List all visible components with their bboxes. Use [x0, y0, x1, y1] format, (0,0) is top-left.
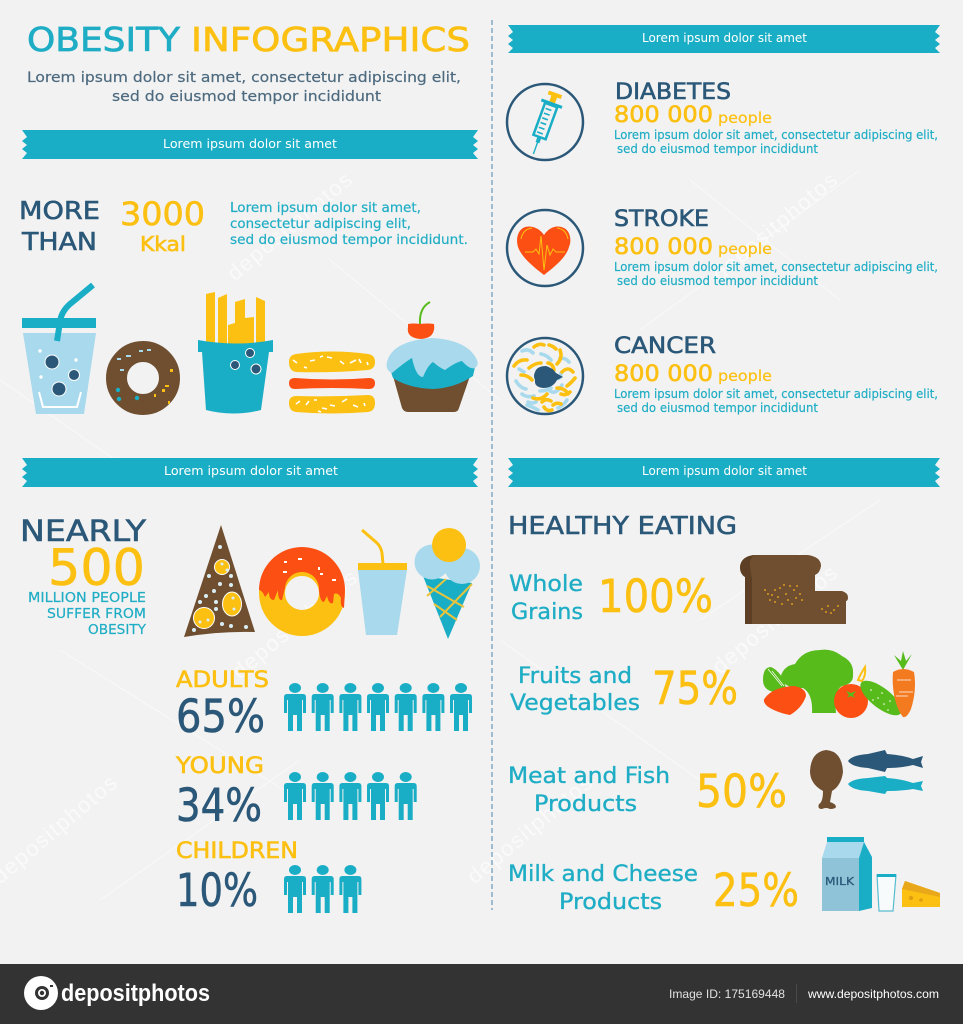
disease: diabetes: 800 000 — [614, 103, 713, 128]
icon: french fries — [198, 292, 273, 414]
stat: adults: ADULTS — [176, 668, 269, 693]
row: whole grains: Whole — [509, 572, 583, 597]
disease: diabetes: sed do eiusmod tempor incididunt — [617, 142, 818, 156]
icon: milk carton — [822, 837, 872, 911]
banner: statistics: Lorem ipsum dolor sit amet — [164, 464, 338, 478]
footer image id: Image ID: 175169448 — [669, 987, 785, 1001]
row: whole grains: Grains — [511, 600, 583, 625]
row: meat and fish — [508, 750, 923, 818]
banner: diseases: Lorem ipsum dolor sit amet — [642, 31, 807, 45]
nearly 500 million: OBESITY — [88, 622, 147, 638]
stat: young: YOUNG — [175, 754, 264, 779]
disease: cancer: people — [718, 367, 772, 385]
banner: calories — [22, 130, 478, 159]
row: milk and cheese: Products — [559, 890, 662, 915]
calorie description: consectetur adipiscing elit, — [230, 217, 411, 232]
more than 3000 kkal: Kkal — [140, 232, 186, 256]
footer bar — [0, 964, 963, 1024]
disease: cancer: CANCER — [614, 334, 716, 359]
stat: adults: 65% — [176, 690, 265, 743]
row: fruits and vegetables: Vegetables — [510, 691, 640, 716]
text: depositphotos — [707, 560, 842, 679]
calorie description: Lorem ipsum dolor sit amet, — [230, 201, 421, 216]
disease: stroke: sed do eiusmod tempor incididunt — [617, 274, 818, 288]
subtitle — [27, 70, 461, 105]
icon: vegetables — [763, 650, 915, 721]
icon: drink cup — [358, 530, 407, 635]
row: meat and fish: 50% — [696, 765, 787, 818]
healthy eating heading: HEALTHY EATING — [508, 511, 737, 540]
icon: milk carton: MILK — [825, 875, 855, 888]
disease: diabetes — [614, 80, 938, 156]
icon: cupcake — [387, 302, 478, 412]
row: fruits and vegetables — [510, 650, 915, 721]
row: fruits and vegetables: 75% — [652, 662, 738, 715]
row: milk and cheese: Milk and Cheese — [508, 862, 698, 887]
icon: glazed donut — [259, 547, 345, 623]
disease: stroke: people — [718, 240, 772, 258]
stat: young — [175, 754, 417, 832]
text: depositphotos — [462, 770, 597, 889]
stat: children: CHILDREN — [176, 839, 298, 864]
more than 3000 kkal: MORE — [19, 196, 100, 225]
row: whole grains: 100% — [598, 570, 713, 623]
banner: healthy eating — [508, 458, 940, 487]
disease: stroke: STROKE — [614, 207, 709, 232]
stat: young: 34% — [176, 779, 262, 832]
calorie description: sed do eiusmod tempor incididunt. — [230, 233, 468, 248]
stat: adults — [176, 668, 472, 743]
disease: stroke: 800 000 — [614, 235, 713, 260]
icon: heart — [507, 210, 583, 286]
icon: cancer cell — [507, 338, 583, 414]
nearly 500 million: NEARLY — [20, 514, 146, 548]
icon: teal fish — [848, 776, 923, 794]
title — [27, 20, 470, 59]
nearly 500 million: SUFFER FROM — [47, 606, 146, 622]
center dashed divider — [491, 20, 493, 910]
text: depositphotos — [707, 167, 842, 286]
disease: cancer: Lorem ipsum dolor sit amet, consectetur adipiscing elit, — [614, 387, 938, 401]
icon: dark fish — [848, 750, 923, 772]
icon: glass of milk — [877, 874, 896, 911]
icon: drumstick — [810, 750, 843, 809]
row: milk and cheese — [508, 837, 940, 917]
row: meat and fish: Meat and Fish — [508, 764, 670, 789]
subtitle: sed do eiusmod tempor incididunt — [112, 89, 381, 105]
banner: diseases — [508, 25, 940, 53]
icon row: seven people — [284, 683, 472, 731]
footer logo: depositphotos — [61, 980, 210, 1007]
title: INFOGRAPHICS — [191, 20, 470, 59]
icon: pizza slice — [184, 525, 255, 637]
disease: diabetes: Lorem ipsum dolor sit amet, consectetur adipiscing elit, — [614, 128, 938, 142]
stat: children: 10% — [176, 864, 258, 917]
disease: stroke — [614, 207, 938, 288]
disease: stroke: Lorem ipsum dolor sit amet, consectetur adipiscing elit, — [614, 260, 938, 274]
row: fruits and vegetables: Fruits and — [518, 664, 632, 689]
banner: calories: Lorem ipsum dolor sit amet — [163, 137, 337, 151]
subtitle: Lorem ipsum dolor sit amet, consectetur adipiscing elit, — [27, 70, 461, 86]
more than 3000 kkal — [19, 195, 205, 256]
icon: burger — [289, 352, 375, 414]
banner: healthy eating: Lorem ipsum dolor sit amet — [642, 464, 807, 478]
icon: bread loaves — [740, 555, 848, 624]
stat: children — [176, 839, 361, 917]
footer url: www.depositphotos.com — [807, 987, 939, 1001]
footer logo — [24, 976, 210, 1010]
row: meat and fish: Products — [534, 792, 637, 817]
icon: soda cup — [22, 285, 96, 414]
text: depositphotos — [222, 167, 357, 286]
banner: statistics — [22, 458, 478, 487]
disease: cancer: 800 000 — [614, 362, 713, 387]
more than 3000 kkal: 3000 — [120, 195, 205, 233]
row: milk and cheese: 25% — [713, 864, 799, 917]
text: depositphotos — [227, 565, 362, 684]
nearly 500 million: MILLION PEOPLE — [28, 590, 146, 606]
icon row: three people — [284, 865, 361, 913]
icon: chocolate donut — [116, 349, 173, 404]
disease: diabetes: DIABETES — [615, 80, 731, 105]
row: whole grains — [509, 555, 848, 625]
nearly 500 million: 500 — [48, 539, 145, 597]
icon: cheese — [902, 881, 940, 907]
title: OBESITY — [27, 20, 181, 59]
icon row: five people — [284, 772, 417, 820]
nearly 500 million — [20, 514, 147, 638]
disease: diabetes: people — [718, 109, 772, 127]
disease: cancer: sed do eiusmod tempor incididunt — [617, 401, 818, 415]
disease: cancer — [614, 334, 938, 415]
icon: syringe — [507, 84, 583, 160]
more than 3000 kkal: THAN — [21, 227, 97, 256]
icon: ice cream cone — [414, 528, 480, 639]
calorie description — [230, 201, 468, 248]
